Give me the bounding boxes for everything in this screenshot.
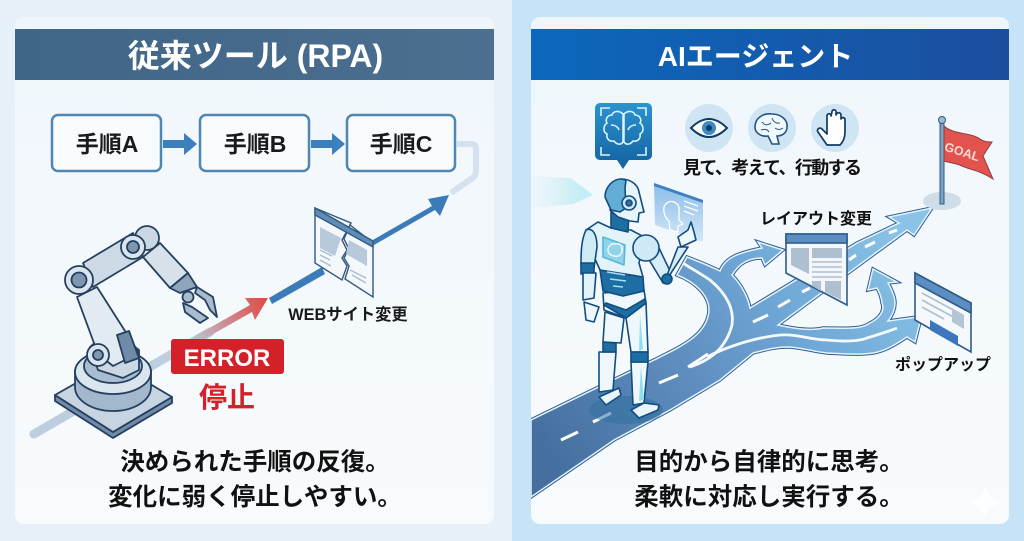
process flow: 手順A to 手順C: 手順C bbox=[370, 131, 432, 157]
icon: layout change page bbox=[786, 234, 847, 305]
icon: popup page bbox=[915, 273, 971, 352]
sparkle watermark bbox=[968, 485, 1002, 519]
icon: hand bbox=[811, 104, 859, 152]
icon: robot arm bbox=[55, 226, 217, 438]
blue path arrow bbox=[269, 195, 449, 304]
panel: AIエージェント bbox=[531, 17, 1009, 524]
icon: AI brain speech bubble bbox=[595, 103, 652, 169]
icon: goal flag bbox=[923, 116, 993, 210]
panel heading: AIエージェント bbox=[531, 29, 1009, 80]
panel heading: 従来ツール (RPA): 従来ツール (RPA) bbox=[128, 38, 383, 74]
summary text bbox=[108, 448, 402, 511]
process flow: 手順A to 手順C: 手順B bbox=[224, 131, 286, 157]
panel heading: 従来ツール (RPA) bbox=[15, 29, 494, 80]
icon: eye bbox=[685, 104, 733, 152]
text: 見て、考えて、行動する: 見て、考えて、行動する bbox=[683, 158, 862, 178]
icons: eye, brain, hand bbox=[685, 104, 859, 152]
summary text: 変化に弱く停止しやすい。 bbox=[108, 483, 402, 511]
light beam bbox=[531, 176, 593, 208]
road with branches bbox=[531, 208, 932, 497]
robot figure bbox=[581, 179, 696, 424]
summary text: 決められた手順の反復。 bbox=[120, 448, 390, 476]
icon: broken web page bbox=[315, 208, 373, 297]
label: WEBサイト変更: WEBサイト変更 bbox=[288, 305, 408, 324]
icon: floating holographic panel bbox=[654, 183, 703, 242]
badge: ERROR bbox=[171, 339, 284, 374]
red error arrow bbox=[190, 298, 268, 346]
icon: goal flag: GOAL bbox=[943, 140, 982, 164]
faded conveyor line behind robot bbox=[34, 332, 210, 434]
label: レイアウト変更: レイアウト変更 bbox=[760, 209, 872, 228]
icon: brain bbox=[748, 104, 796, 152]
panel heading: AIエージェント: AIエージェント bbox=[658, 41, 853, 72]
label: ポップアップ: ポップアップ bbox=[895, 356, 991, 374]
summary text: 柔軟に対応し実行する。 bbox=[634, 483, 904, 511]
process flow: 手順A to 手順C: 手順A bbox=[76, 131, 138, 157]
summary text bbox=[634, 448, 904, 511]
panel: 従来ツール (RPA) bbox=[15, 17, 494, 524]
process flow: 手順A to 手順C bbox=[52, 115, 476, 193]
badge: ERROR: ERROR bbox=[184, 345, 270, 372]
label: 停止: 停止 bbox=[199, 382, 255, 413]
summary text: 目的から自律的に思考。 bbox=[634, 448, 904, 476]
